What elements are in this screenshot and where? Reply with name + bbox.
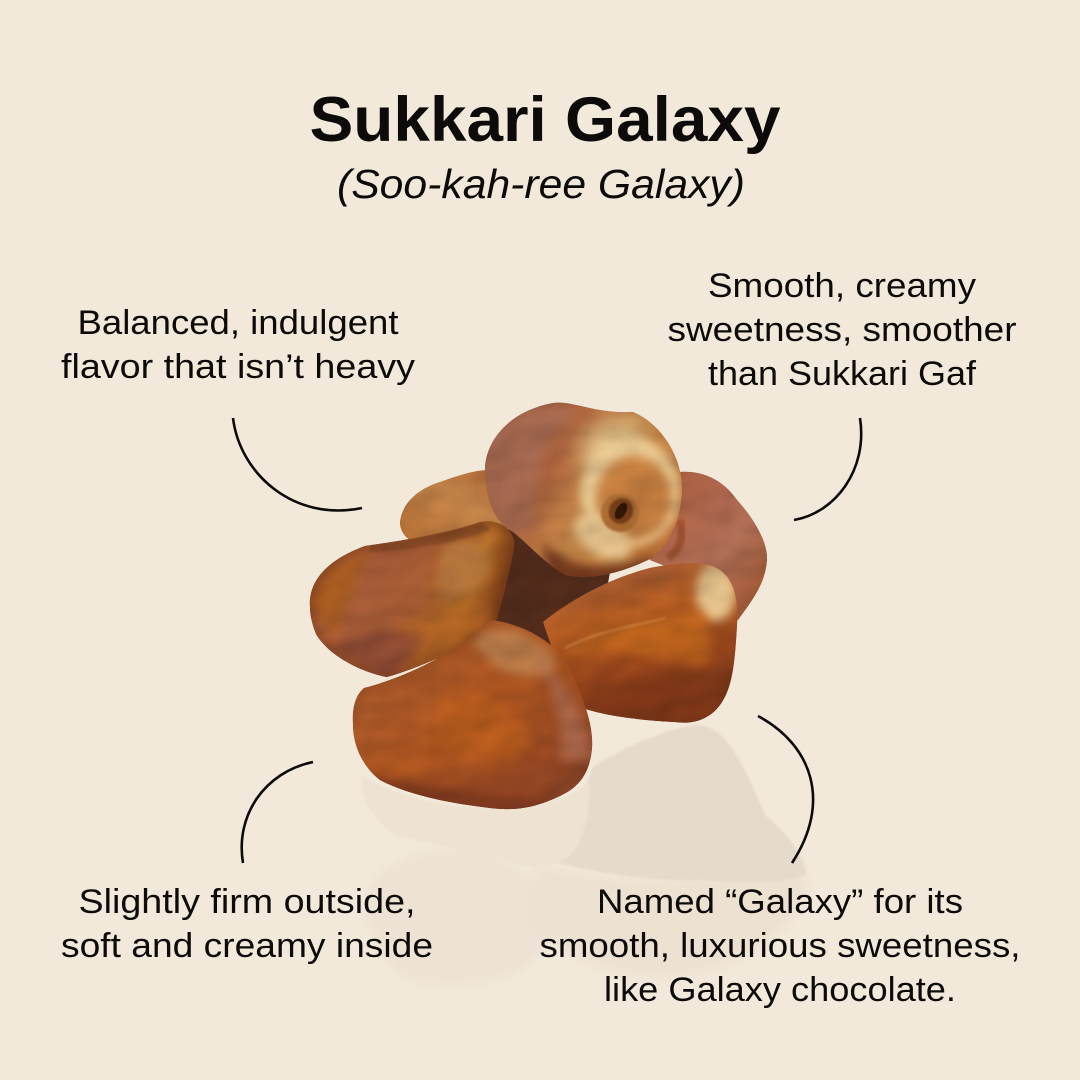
text block: firm outside, creamy inside: Slightly firm outside, (78, 883, 416, 921)
arc: firm outside callout (242, 762, 313, 863)
date: left (305, 521, 514, 685)
date: front (353, 621, 592, 820)
title: Sukkari Galaxy (310, 85, 780, 155)
date: top with hollow end (484, 402, 682, 577)
arc: creamy sweetness callout (794, 418, 861, 520)
reflection: left date (361, 775, 590, 867)
text block: creamy sweetness (668, 267, 1016, 393)
hollow pit cavity (601, 494, 639, 532)
arc: named galaxy callout (758, 716, 813, 863)
infographic canvas (62, 95, 1018, 1008)
text block: creamy sweetness: than Sukkari Gaf (708, 355, 977, 393)
date: back right (650, 472, 767, 620)
reflection: right date (548, 725, 806, 882)
text block: firm outside, creamy inside: soft and creamy inside (61, 927, 433, 965)
reflection: lower soft dates (368, 849, 806, 985)
text block: balanced flavor: Balanced, indulgent (78, 304, 399, 342)
date: back left (400, 470, 505, 540)
photo: pile of sukkari dates (305, 403, 767, 820)
text block: named galaxy: smooth, luxurious sweetness, (540, 927, 1020, 965)
text block: balanced flavor (61, 304, 415, 386)
date: dark center (488, 529, 610, 680)
subtitle: pronunciation: (Soo-kah-ree Galaxy) (337, 161, 745, 207)
text block: named galaxy: Named “Galaxy” for its (597, 883, 963, 921)
text block: creamy sweetness: sweetness, smoother (668, 311, 1016, 349)
date: front right (543, 562, 737, 730)
text block: creamy sweetness: Smooth, creamy (708, 267, 976, 305)
text block: firm outside, creamy inside (61, 883, 433, 965)
arc: balanced flavor callout (233, 418, 362, 510)
date reflection (361, 725, 806, 985)
text block: named galaxy (540, 883, 1020, 1009)
text block: named galaxy: like Galaxy chocolate. (604, 971, 956, 1009)
text block: balanced flavor: flavor that isn’t heavy (61, 348, 415, 386)
